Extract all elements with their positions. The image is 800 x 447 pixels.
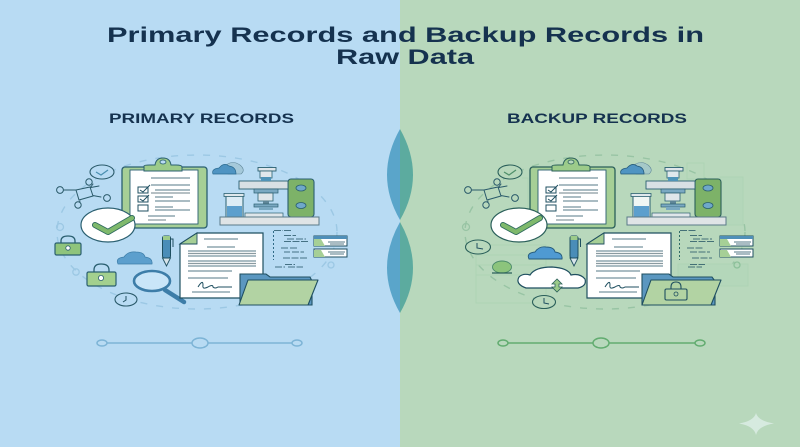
icon: small folder cards [314,236,347,257]
central lens divider [387,129,413,313]
icon: network diagram [465,179,518,208]
icon: lock lower [87,264,116,286]
icon: top cloud [621,162,651,174]
panel: backup background [400,0,800,447]
heading: backup records: BACKUP RECORDS [507,111,687,126]
icon: pen [162,236,173,266]
title [107,24,704,69]
icon: check badge [491,208,547,242]
timeline: backup [498,338,705,348]
icon: blue cloud [528,247,562,259]
icon: clipboard [122,158,207,228]
icon: test tube [224,194,244,217]
icon: check clock [90,165,114,179]
icon: test tube [631,194,651,217]
icon: lock upper [55,236,81,255]
icon: network diagram [57,179,110,208]
icon: folder with lock [642,274,721,305]
heading: primary records: PRIMARY RECORDS [109,111,294,126]
icon: microscope machine [220,168,319,225]
icon: top cloud [213,162,243,174]
icon: signed document [587,233,671,298]
icon: small folder cards [720,236,753,257]
title: Primary Records and Backup Records in [107,24,704,47]
panel: primary background [0,0,400,447]
icon: white cloud with arrows [518,267,585,292]
illustration: primary records [55,155,347,309]
icon: pen [570,236,580,266]
icon: microscope machine [627,168,726,225]
icon: bottom clock [532,296,556,308]
icon: code lines [274,230,308,267]
illustration: backup records [462,155,753,309]
icon: left clock [466,240,490,254]
icon: code lines [680,230,714,267]
icon: signed document [180,233,263,298]
icon: small clock [115,293,137,306]
icon: clipboard [530,158,615,228]
title: Raw Data [336,46,474,69]
icon: magnifier [134,271,184,302]
decorative rings [462,224,740,268]
icon: check clock [498,165,522,179]
icon: folder [239,274,318,305]
icon: cloud lower [117,252,152,264]
icon: check badge [81,208,135,242]
timeline: primary [97,338,302,348]
decorative rings [56,224,334,275]
ghost panels [476,163,748,303]
icon: green bubble [492,261,512,273]
icon: sparkle watermark [739,413,774,435]
